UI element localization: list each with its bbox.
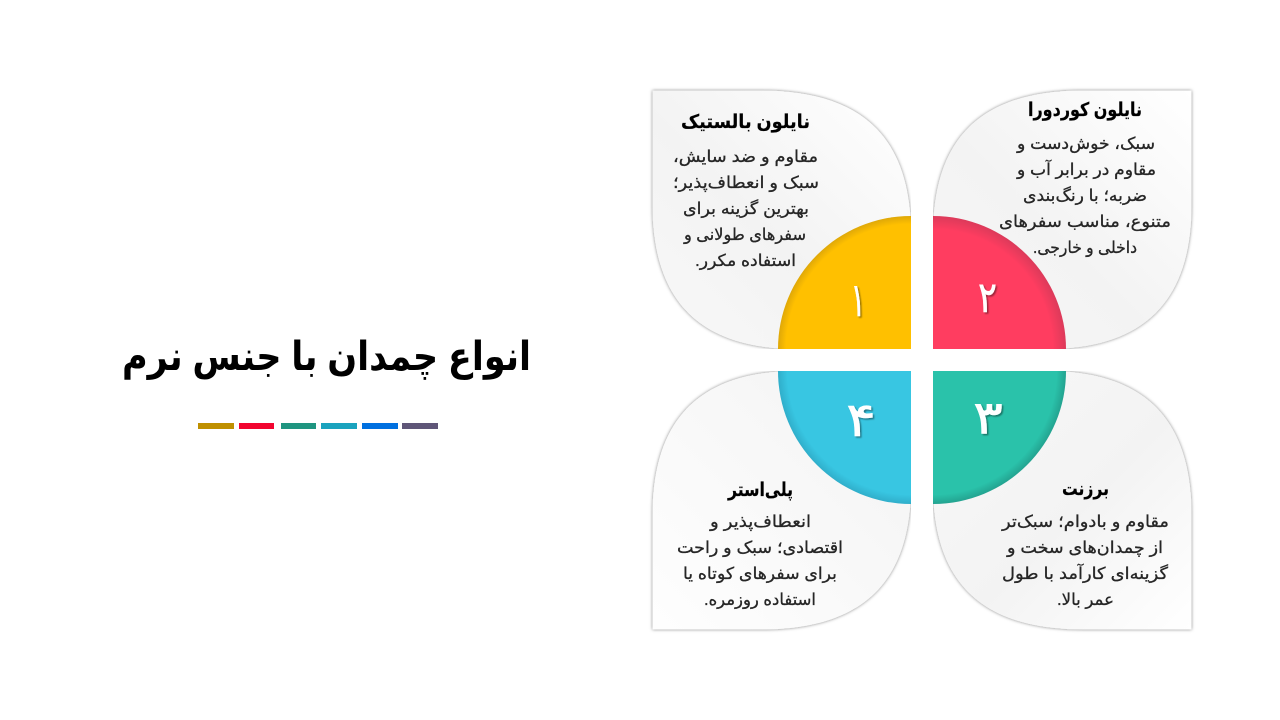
body: brunet: گزینه‌ای کارآمد با طول (1002, 564, 1168, 584)
number 2: ۲ (978, 274, 997, 322)
quadrant 1 (778, 216, 911, 349)
body: cordura nylon: سبک، خوش‌دست و (1016, 135, 1155, 154)
body: polyester: استفاده روزمره. (704, 591, 816, 610)
body: ballistic nylon: استفاده مکرر. (695, 252, 796, 271)
body: brunet: از چمدان‌های سخت و (1006, 539, 1163, 558)
petal background 3 (933, 371, 1192, 630)
body: cordura nylon (999, 135, 1171, 258)
body: brunet (1001, 513, 1169, 610)
quadrant 4 (778, 371, 911, 504)
panel: cordura nylon (933, 90, 1192, 349)
body: cordura nylon: داخلی و خارجی. (1033, 239, 1137, 258)
number 4: ۴ (846, 393, 876, 446)
panel: ballistic nylon (652, 90, 911, 349)
body: cordura nylon: ضربه؛ با رنگ‌بندی (1023, 186, 1147, 206)
title: انواع چمدان با جنس نرم (122, 335, 531, 380)
body: brunet: عمر بالا. (1057, 591, 1114, 610)
body: polyester (677, 513, 843, 610)
heading: polyester: پلی‌استر (727, 480, 793, 501)
panel: brunet (933, 371, 1192, 630)
petal background 4 (652, 371, 911, 630)
body: cordura nylon: مقاوم در برابر آب و (1016, 160, 1156, 180)
body: ballistic nylon (673, 148, 819, 271)
petal background 1 (652, 90, 911, 349)
quadrant 3 (933, 371, 1066, 504)
panel: polyester (652, 371, 911, 630)
petal background 2 (933, 90, 1192, 349)
body: ballistic nylon: سبک و انعطاف‌پذیر؛ (673, 174, 819, 193)
body: ballistic nylon: بهترین گزینه برای (683, 199, 809, 219)
body: ballistic nylon: مقاوم و ضد سایش، (673, 148, 818, 167)
quadrant 2 (933, 216, 1066, 349)
number 1: ۱ (850, 273, 866, 326)
heading: brunet: برزنت (1062, 479, 1109, 500)
colour bars (198, 423, 438, 429)
body: polyester: انعطاف‌پذیر و (709, 513, 811, 532)
body: brunet: مقاوم و بادوام؛ سبک‌تر (1001, 513, 1169, 532)
number 3: ۳ (973, 392, 1003, 444)
heading: cordura nylon: نایلون کوردورا (1028, 100, 1142, 121)
body: polyester: اقتصادی؛ سبک و راحت (677, 539, 843, 558)
heading: ballistic nylon: نایلون بالستیک (681, 112, 810, 133)
body: cordura nylon: متنوع، مناسب سفرهای (999, 213, 1171, 232)
body: ballistic nylon: سفرهای طولانی و (683, 226, 806, 245)
body: polyester: برای سفرهای کوتاه یا (683, 565, 837, 584)
